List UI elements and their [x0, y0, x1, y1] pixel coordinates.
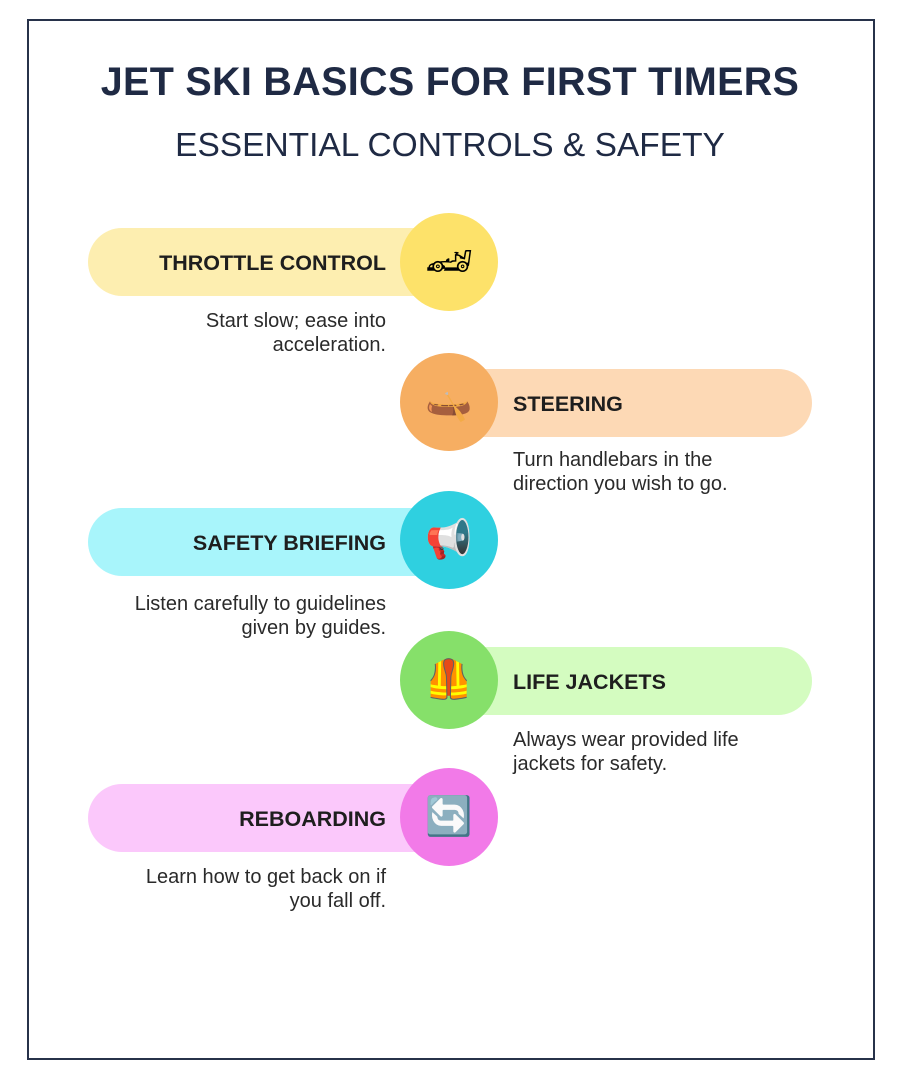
text: throttle description: Start slow; ease into [206, 310, 386, 332]
subtitle: ESSENTIAL CONTROLS & SAFETY [175, 127, 725, 164]
text: throttle description [206, 310, 386, 356]
icon: megaphone: 📢 [425, 519, 473, 561]
pill: safety briefing [88, 508, 468, 576]
text: reboarding description: you fall off. [290, 890, 386, 912]
pill: reboarding: REBOARDING [239, 807, 386, 831]
pill: life jackets: LIFE JACKETS [513, 670, 666, 694]
text: life jackets description: Always wear provided life [513, 729, 739, 751]
text: life jackets description: jackets for safety. [513, 753, 667, 775]
text: safety description: given by guides. [241, 617, 386, 639]
icon: refresh [400, 768, 498, 866]
icon: canoe: 🛶 [425, 381, 473, 423]
pill: safety briefing: SAFETY BRIEFING [193, 531, 386, 555]
icon: race car: 🏎 [425, 241, 473, 283]
pill: life jackets [430, 647, 812, 715]
text: steering description [513, 449, 728, 495]
text: life jackets description [512, 729, 739, 775]
text: reboarding description [146, 866, 386, 912]
text: steering description: Turn handlebars in the [513, 449, 712, 471]
pill: throttle control: THROTTLE CONTROL [159, 251, 386, 275]
icon: megaphone [400, 491, 498, 589]
pill: steering: STEERING [513, 392, 623, 416]
icon: refresh: 🔄 [425, 796, 473, 838]
pill: reboarding [88, 784, 468, 852]
text: safety description: Listen carefully to guidelines [135, 593, 386, 615]
icon: safety vest: 🦺 [425, 659, 473, 701]
text: throttle description: acceleration. [273, 334, 386, 356]
text: safety description [135, 593, 386, 639]
pill: throttle control [88, 228, 468, 296]
icon: race car [400, 213, 498, 311]
icon: canoe [400, 353, 498, 451]
icon: safety vest [400, 631, 498, 729]
title: JET SKI BASICS FOR FIRST TIMERS [101, 60, 799, 104]
pill: steering [430, 369, 812, 437]
text: steering description: direction you wish to go. [513, 473, 728, 495]
text: reboarding description: Learn how to get back on if [146, 866, 386, 888]
